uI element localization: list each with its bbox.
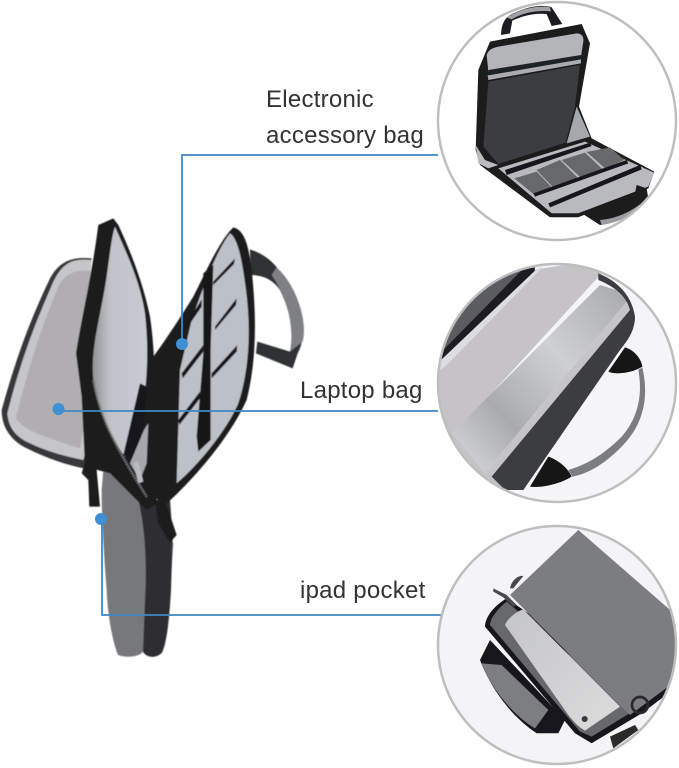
callout line: electronic accessory bag (182, 155, 438, 344)
circle photo: tablet in front pocket (438, 526, 679, 764)
label: Electronic accessory bag (266, 86, 424, 149)
zipper pulls (82, 457, 143, 507)
bag left flap: laptop compartment (2, 258, 100, 468)
bag right panel: electronic accessory compartment (153, 227, 255, 507)
label: Electronic accessory bag: accessory bag (266, 122, 424, 149)
callout dot: ipad pocket (95, 513, 107, 525)
callout dot: electronic accessory bag (176, 338, 188, 350)
callout line: laptop bag (59, 410, 438, 412)
callout dot: laptop bag (52, 403, 64, 415)
label: Laptop bag: Laptop bag (300, 377, 423, 404)
main product: opened bag (2, 218, 304, 657)
bag handle (250, 249, 304, 368)
bag centre panel (76, 218, 157, 510)
label: Electronic accessory bag: Electronic (266, 86, 374, 113)
circle photo: laptop in sleeve (435, 260, 676, 502)
label: ipad pocket: ipad pocket (300, 577, 426, 604)
bag lower body (102, 470, 173, 657)
circle photo: open accessory compartment (438, 2, 676, 240)
callout line: ipad pocket (102, 519, 441, 615)
